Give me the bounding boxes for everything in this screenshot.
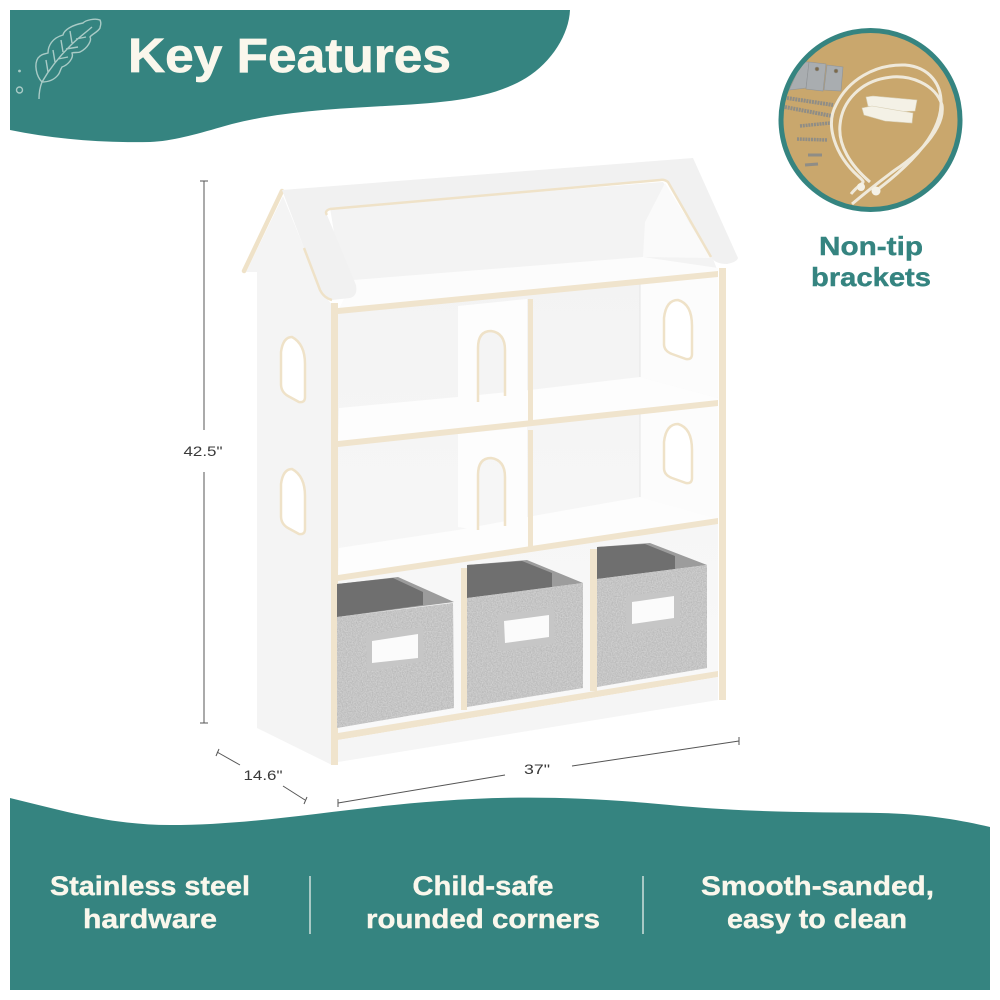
bin 2 <box>467 560 583 598</box>
dimension: width 37 <box>338 737 739 807</box>
wall anchors <box>862 96 917 123</box>
feature: smooth-sanded, easy to clean: Smooth-sanded, <box>701 871 934 901</box>
feature: stainless steel hardware: hardware <box>83 904 217 934</box>
interior back walls <box>338 276 718 735</box>
birch frame edges <box>331 268 726 765</box>
room divider walls with arched doorways <box>458 299 527 549</box>
header banner <box>10 10 570 142</box>
roof birch edge <box>304 180 711 300</box>
dimension: height 42.5: 42.5" <box>184 443 223 459</box>
label: non-tip brackets: Non-tip <box>819 231 923 261</box>
bin 3 <box>597 543 707 579</box>
metal brackets <box>789 62 843 91</box>
attic right wall <box>643 183 711 258</box>
side panel <box>246 196 332 765</box>
icon: leaf <box>16 19 101 99</box>
inner right walls <box>640 276 718 398</box>
arched door edges <box>478 331 505 530</box>
feature: stainless steel hardware <box>50 871 250 934</box>
storage bins <box>337 543 707 728</box>
attic floor <box>338 257 718 311</box>
feature: child-safe rounded corners: rounded corners <box>366 904 600 934</box>
screws <box>785 98 833 165</box>
dollhouse bookcase <box>244 158 738 765</box>
feature: child-safe rounded corners <box>366 871 600 934</box>
bin 1 <box>337 577 454 617</box>
feature: smooth-sanded, easy to clean <box>701 871 934 934</box>
attic back <box>330 182 718 300</box>
feature: stainless steel hardware: Stainless steel <box>50 871 250 901</box>
feature: child-safe rounded corners: Child-safe <box>412 871 554 901</box>
shelf surfaces <box>338 377 718 443</box>
title: Key Features <box>128 30 451 83</box>
cable ties <box>832 65 942 204</box>
dimension: width 37: 37" <box>524 761 550 777</box>
label: non-tip brackets <box>811 231 931 292</box>
photo: non-tip brackets hardware <box>778 28 963 212</box>
label: non-tip brackets: brackets <box>811 262 931 292</box>
footer banner <box>10 798 990 990</box>
dimension: depth 14.6 <box>216 749 307 804</box>
dimension: height 42.5 <box>184 181 223 723</box>
feature: smooth-sanded, easy to clean: easy to clean <box>727 904 907 934</box>
base plinth <box>338 677 718 762</box>
left roof edge <box>244 191 282 271</box>
dimension: depth 14.6: 14.6" <box>244 767 283 783</box>
roof front plate <box>282 158 738 300</box>
side and inner windows <box>281 300 692 534</box>
